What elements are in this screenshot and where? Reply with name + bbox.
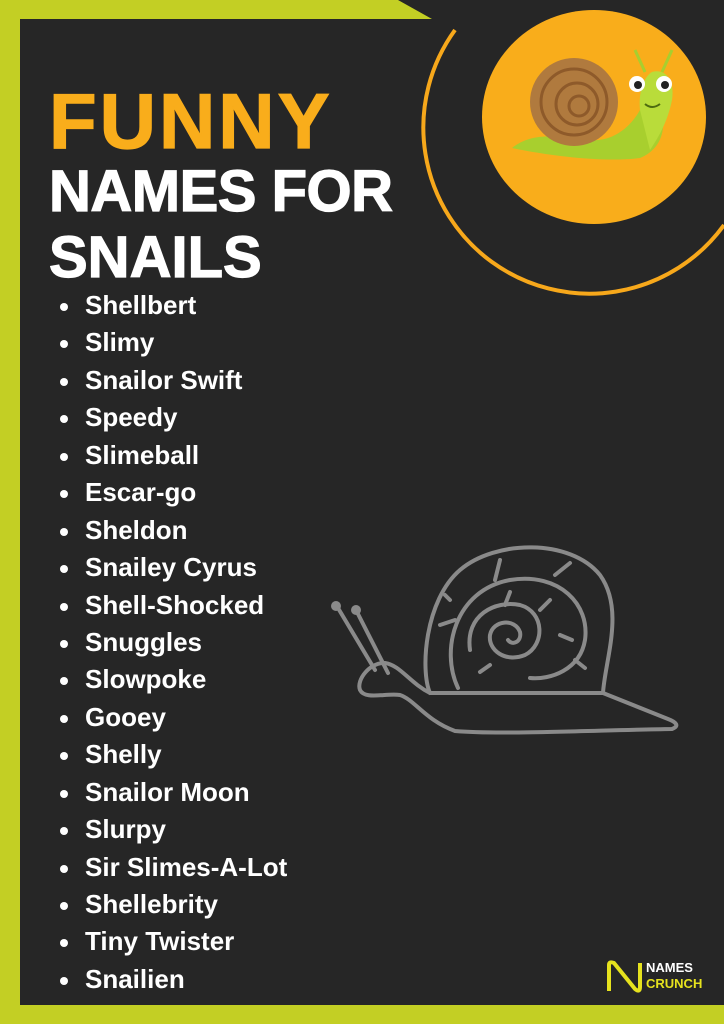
list of names: Snailor Moon: [85, 777, 250, 807]
list of names: Shellbert: [85, 290, 196, 320]
title: SNAILS: [49, 225, 262, 290]
list of names: Slimeball: [85, 440, 199, 470]
list of names: Speedy: [85, 402, 178, 432]
list of names: Shell-Shocked: [85, 590, 264, 620]
orange circle with cute snail: [482, 10, 706, 224]
list of names: Snailor Swift: [85, 365, 242, 395]
list of names: Snuggles: [85, 627, 202, 657]
list of names: [60, 290, 287, 994]
list of names: Shellebrity: [85, 889, 218, 919]
list of names: Sir Slimes-A-Lot: [85, 852, 287, 882]
title: [49, 77, 393, 290]
list of names: Gooey: [85, 702, 166, 732]
orange ring arc: [421, 28, 724, 296]
list of names: Slurpy: [85, 814, 166, 844]
cute snail: [512, 50, 673, 160]
list of names: Sheldon: [85, 515, 188, 545]
list of names: Shelly: [85, 739, 162, 769]
outline snail illustration: [331, 545, 678, 734]
logo: names crunch: [607, 960, 702, 993]
list of names: Slowpoke: [85, 664, 206, 694]
title: NAMES FOR: [49, 159, 392, 224]
list of names: Snailey Cyrus: [85, 552, 257, 582]
logo: names crunch: CRUNCH: [646, 976, 702, 991]
list of names: Slimy: [85, 327, 154, 357]
list of names: Snailien: [85, 964, 185, 994]
title: FUNNY: [49, 77, 333, 165]
list of names: Escar-go: [85, 477, 196, 507]
logo: names crunch: NAMES: [646, 960, 693, 975]
list of names: Tiny Twister: [85, 926, 234, 956]
